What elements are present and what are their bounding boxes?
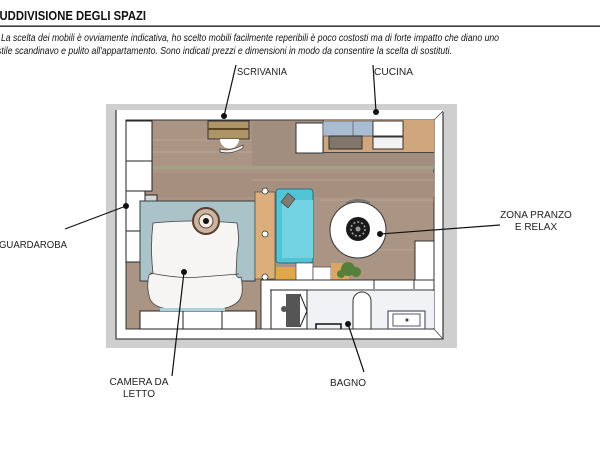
label: guardaroba: GUARDAROBA [0, 240, 67, 251]
wardrobe [126, 121, 157, 262]
sofa [276, 189, 313, 263]
dining table [330, 200, 386, 258]
sink [388, 311, 425, 329]
kitchen [296, 120, 434, 153]
bench [140, 308, 256, 329]
label: bagno [330, 321, 366, 389]
intro text: La scelta dei mobili è ovviamente indicativa, ho scelto mobili facilmente reperibili è poco costosti ma di forte impatto che diano uno [1, 32, 499, 44]
rug [140, 201, 255, 281]
label: camera da letto: CAMERA DA [110, 377, 169, 388]
label: zona pranzo e relax [377, 210, 572, 237]
plant [337, 262, 361, 278]
wood floor [126, 120, 434, 329]
toilet [353, 292, 371, 329]
label: cucina [373, 65, 413, 115]
cabinet right [415, 241, 434, 280]
label: cucina: CUCINA [374, 67, 413, 78]
shelf [255, 188, 275, 280]
label: scrivania [221, 65, 287, 119]
label: zona pranzo e relax: ZONA PRANZO [500, 210, 572, 221]
label: guardaroba [0, 203, 129, 251]
label: scrivania: SCRIVANIA [237, 67, 287, 78]
shower [271, 290, 307, 329]
floor lamp / side table [193, 208, 219, 234]
header rule [0, 26, 600, 27]
bookcase below sofa [276, 263, 349, 280]
label: bagno: BAGNO [330, 378, 366, 389]
floor plan [106, 104, 457, 348]
outer wall [106, 104, 457, 348]
intro text: stile scandinavo e pulito all'appartamento. Sono indicati prezzi e dimensioni in modo da consentire la scelta di sostituti. [0, 45, 452, 57]
label: zona pranzo e relax: E RELAX [515, 222, 557, 233]
label: camera da letto [110, 269, 187, 400]
intro text [0, 32, 499, 57]
label: camera da letto: LETTO [123, 389, 155, 400]
bathroom [261, 280, 434, 329]
desk [208, 121, 249, 153]
bed [148, 221, 242, 309]
